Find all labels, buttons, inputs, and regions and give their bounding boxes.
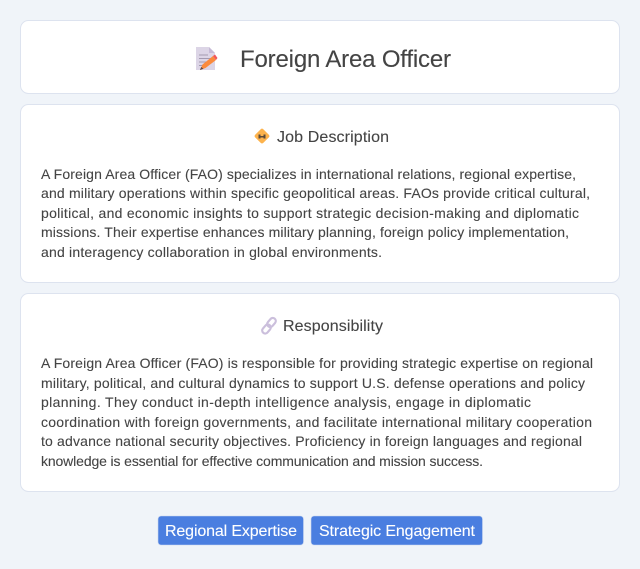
icon: chain link [261, 317, 277, 335]
panel: title card [20, 20, 620, 94]
text block: job description: and interagency collaboration in global environments. [41, 244, 382, 260]
panel: responsibility [20, 294, 620, 492]
text block: responsibility: to advance national security objectives. Proficiency in foreign languages and regional [41, 433, 582, 449]
tag: regional expertise [158, 516, 304, 545]
text block: job description [41, 166, 590, 260]
title: Foreign Area Officer [240, 46, 451, 73]
text block: job description: missions. Their expertise enhances military planning, foreign policy implementation, [41, 224, 569, 240]
text block: job description: and military operations within specific geopolitical areas. FAOs provide critical cultural, [41, 185, 590, 201]
panel: job description [20, 104, 620, 282]
text block: job description: A Foreign Area Officer (FAO) specializes in international relations, regional expertise, [41, 166, 576, 182]
text block: responsibility [41, 355, 593, 469]
text block: job description: political, and economic insights to support strategic decision-making and diplomatic [41, 205, 579, 221]
text block: responsibility: planning. They conduct in-depth intelligence analysis, engage in diplomatic [41, 394, 531, 410]
tag: strategic engagement [311, 516, 482, 545]
heading: job description: Job Description [277, 129, 389, 146]
icon: orange diamond sign [254, 128, 270, 144]
icon: document with pencil [196, 47, 218, 70]
text block: responsibility: A Foreign Area Officer (FAO) is responsible for providing strategic expertise on regional [41, 355, 593, 371]
tag: strategic engagement: Strategic Engagement [319, 523, 476, 540]
text block: responsibility: coordination with foreign governments, and facilitate international military cooperation [41, 414, 592, 430]
text block: responsibility: military, political, and cultural dynamics to support U.S. defense operations and policy [41, 375, 585, 391]
tag: regional expertise: Regional Expertise [165, 523, 297, 540]
text block: responsibility: knowledge is essential for effective communication and mission success. [41, 453, 483, 469]
heading: responsibility: Responsibility [283, 318, 383, 335]
